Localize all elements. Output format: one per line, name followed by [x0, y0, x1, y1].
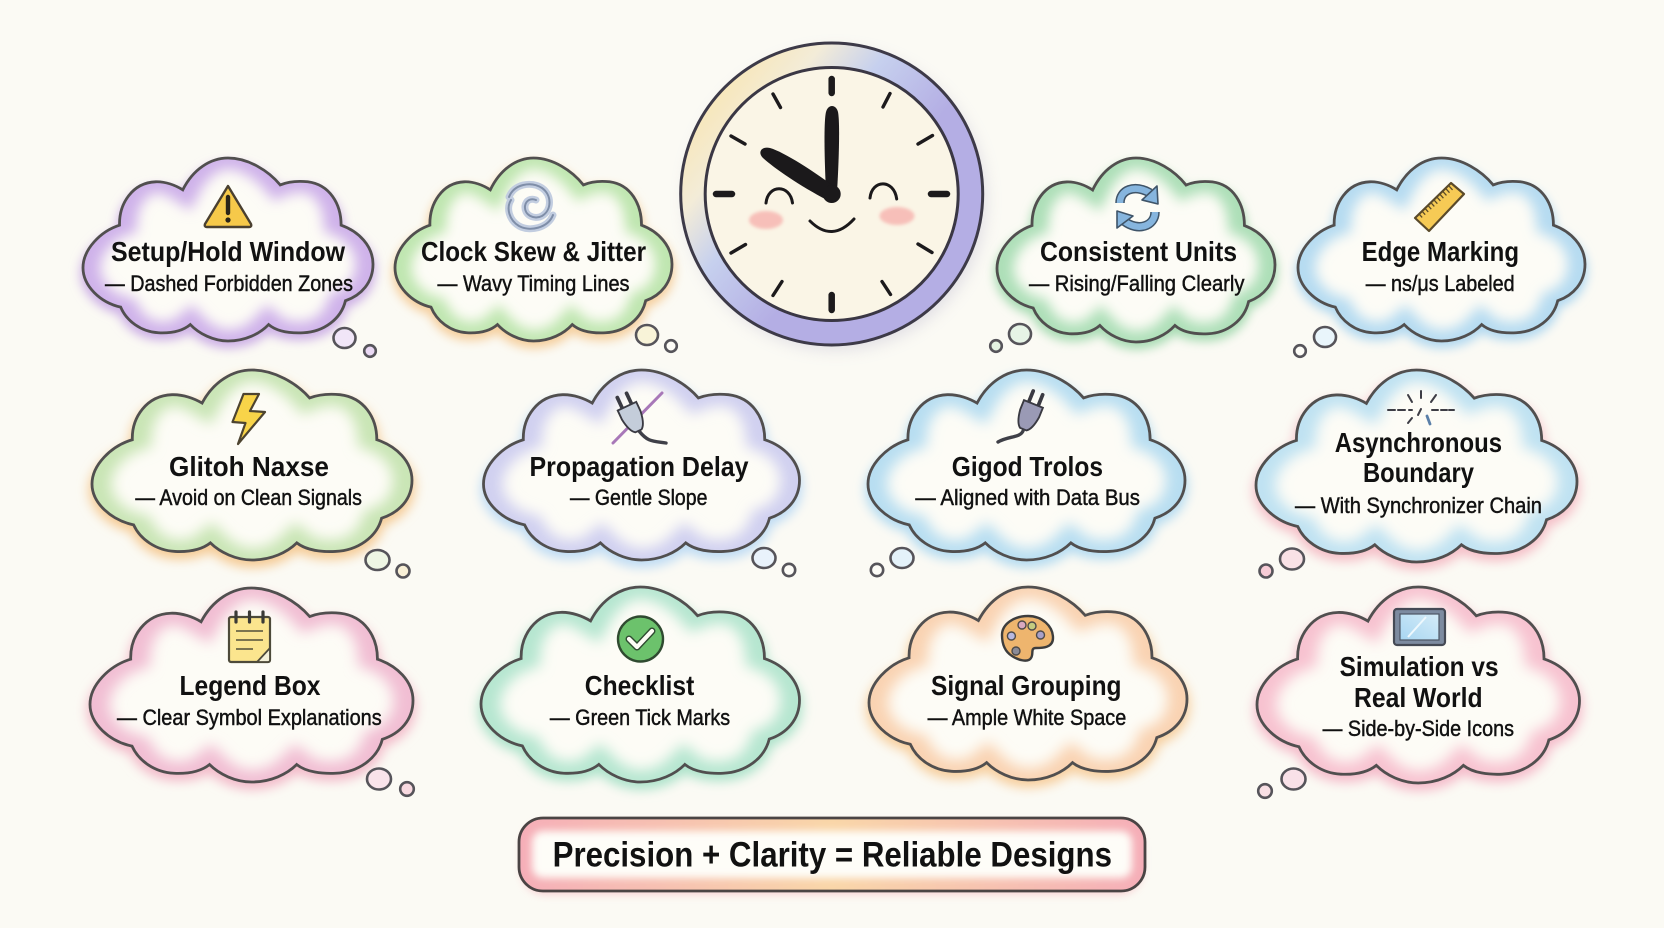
smiling clock — [681, 43, 986, 350]
cloud shape — [90, 588, 413, 788]
banner text: Precision + Clarity = Reliable Designs — [553, 836, 1112, 874]
thought cloud: glitch noise — [92, 370, 412, 578]
thought cloud: simulation vs real world — [1257, 587, 1580, 798]
cloud text: — ns/μs Labeled — [1366, 271, 1515, 296]
thought cloud: asynchronous boundary — [1256, 370, 1577, 578]
thought bubbles — [367, 768, 414, 796]
thought cloud: clock skew and jitter — [395, 158, 677, 352]
cloud text: Asynchronous — [1335, 427, 1502, 458]
cloud text: Glitoh Naxse — [169, 451, 329, 482]
clock eyes — [766, 184, 897, 203]
cloud text: — Avoid on Clean Signals — [135, 485, 362, 510]
thought cloud: setup/hold window — [83, 158, 376, 357]
thought cloud: consistent units — [990, 158, 1275, 352]
cloud text — [1362, 236, 1519, 296]
icon: monitor screen — [1394, 609, 1445, 645]
cloud text — [105, 236, 353, 296]
cloud text — [135, 451, 362, 510]
cloud text: Clock Skew & Jitter — [421, 236, 646, 267]
banner shape — [519, 818, 1145, 895]
cloud text: — Wavy Timing Lines — [438, 271, 630, 296]
thought bubbles — [871, 548, 914, 576]
cloud text — [915, 451, 1140, 510]
icon: paint palette — [1002, 616, 1053, 661]
clock face — [705, 68, 958, 320]
thought cloud: checklist — [481, 587, 800, 788]
cloud text: — Side-by-Side Icons — [1323, 716, 1514, 741]
clock smile — [810, 219, 854, 232]
conclusion banner — [519, 818, 1145, 895]
clock shadow — [686, 50, 986, 350]
cloud text: Simulation vs — [1340, 651, 1499, 682]
cloud text: Real World — [1354, 682, 1483, 713]
cloud text — [1029, 236, 1244, 296]
cloud shape — [869, 587, 1187, 786]
cloud text: — Clear Symbol Explanations — [117, 705, 382, 730]
cloud text: — Rising/Falling Clearly — [1029, 271, 1244, 296]
cloud text: — Aligned with Data Bus — [915, 485, 1140, 510]
cloud shape — [1256, 370, 1577, 568]
cloud text — [1295, 427, 1542, 518]
icon: plug — [998, 389, 1047, 442]
cloud text: Setup/Hold Window — [111, 236, 346, 267]
icon: crossed plug — [613, 391, 666, 443]
icon: dashed sparks — [1388, 391, 1454, 424]
thought bubbles — [1258, 768, 1306, 798]
cloud text: Edge Marking — [1362, 236, 1519, 267]
cloud shape — [83, 158, 373, 347]
cloud text: Boundary — [1363, 457, 1475, 488]
thought cloud: legend box — [90, 588, 414, 796]
cloud shape — [868, 370, 1185, 566]
thought bubbles — [334, 328, 376, 357]
cloud text: — Green Tick Marks — [550, 705, 730, 730]
cloud text: Propagation Delay — [530, 451, 749, 482]
thought cloud: propagation delay — [484, 370, 800, 576]
thought bubbles — [636, 325, 677, 352]
clock hands — [760, 106, 841, 203]
thought cloud: edge marking — [1294, 158, 1585, 357]
cloud shape — [997, 158, 1275, 348]
icon: swirl — [509, 184, 553, 229]
thought bubbles — [752, 548, 795, 576]
cloud text — [928, 670, 1126, 730]
cloud text: Legend Box — [180, 670, 321, 701]
cloud shape — [92, 370, 412, 566]
cloud text: Checklist — [585, 670, 694, 701]
icon: green check — [618, 616, 663, 662]
thought cloud: signal grouping — [869, 587, 1187, 786]
thought bubbles — [366, 550, 410, 578]
cloud text: Signal Grouping — [931, 670, 1122, 701]
thought cloud: signal traces — [868, 370, 1185, 576]
hour ticks — [716, 79, 947, 310]
cloud text — [550, 670, 730, 730]
cloud text — [530, 451, 749, 510]
cloud shape — [1298, 158, 1585, 347]
cloud text: — Gentle Slope — [570, 485, 707, 510]
cloud shape — [395, 158, 672, 347]
thought bubbles — [1294, 327, 1336, 357]
cloud text: — With Synchronizer Chain — [1295, 493, 1542, 518]
cloud shape — [484, 370, 800, 566]
icon: ruler — [1415, 183, 1464, 231]
icon: notepad — [229, 612, 270, 662]
icon: warning triangle — [205, 186, 251, 227]
cloud text: — Dashed Forbidden Zones — [105, 271, 353, 296]
cloud text — [421, 236, 646, 296]
thought bubbles — [1260, 548, 1304, 578]
icon: refresh arrows — [1117, 186, 1158, 228]
thought bubbles — [990, 324, 1031, 352]
clock ring — [693, 55, 971, 333]
cloud shape — [1257, 587, 1580, 789]
cloud text: Consistent Units — [1040, 236, 1237, 267]
cloud text: — Ample White Space — [928, 705, 1126, 730]
cloud shape — [481, 587, 800, 788]
cloud text: Gigod Trolos — [952, 451, 1103, 482]
cloud text — [117, 670, 382, 730]
clock cheeks — [749, 207, 914, 229]
cloud text — [1323, 651, 1514, 741]
icon: lightning bolt — [232, 394, 265, 444]
